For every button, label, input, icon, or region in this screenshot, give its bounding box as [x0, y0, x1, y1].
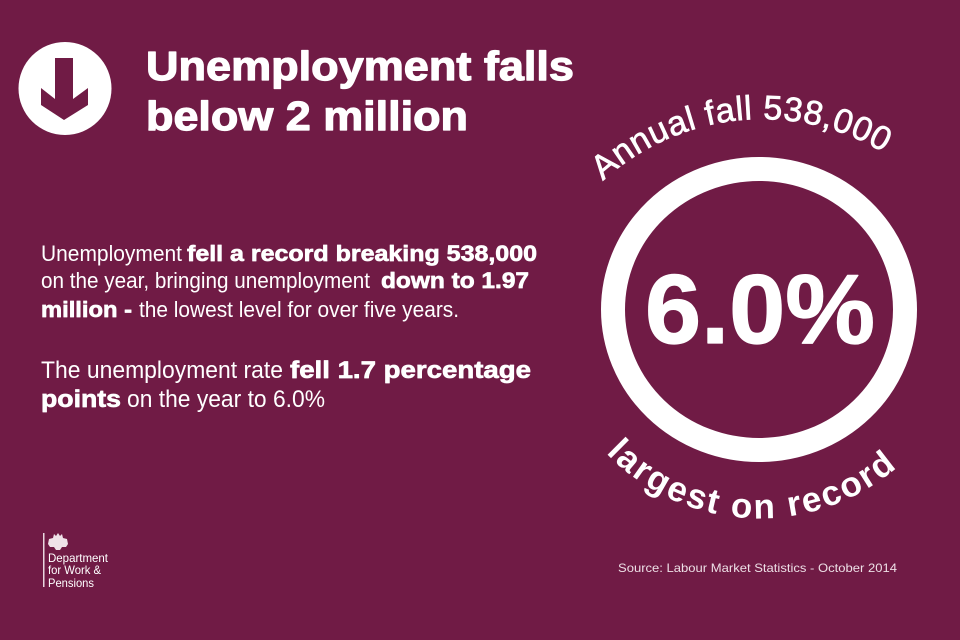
text block: unemployment rate: points — [41, 386, 121, 413]
logo rule — [43, 533, 44, 587]
title — [146, 43, 574, 139]
text block: record fall — [41, 241, 537, 322]
logo: Department for Work & Pensions — [43, 533, 109, 590]
logo text: for Work & — [48, 563, 101, 577]
big number: 6.0% — [645, 254, 875, 364]
logo text: Department — [48, 551, 109, 565]
curved caption: largest on record: largest on record — [608, 436, 896, 519]
title: Unemployment falls — [146, 43, 574, 89]
text block: record fall: down to 1.97 — [381, 268, 529, 293]
text block: record fall: fell a record breaking 538,000 — [187, 241, 537, 266]
text block: record fall: million - — [41, 297, 132, 322]
ring chart with curved captions — [594, 94, 917, 519]
text block: record fall: the lowest level for over five years. — [139, 297, 459, 322]
curved caption: annual fall: Annual fall 538,000 — [594, 94, 891, 182]
title: below 2 million — [146, 93, 468, 139]
text block: unemployment rate: on the year to 6.0% — [127, 386, 325, 413]
text block: record fall: on the year, bringing unemployment — [41, 268, 371, 293]
logo text: Pensions — [48, 576, 94, 590]
text block: unemployment rate — [41, 357, 531, 413]
icon: royal crest — [48, 533, 68, 550]
icon: down arrow in circle — [18, 42, 112, 135]
source note: Source: Labour Market Statistics - October 2014 — [618, 561, 897, 575]
ring — [613, 169, 905, 450]
logo text — [48, 551, 109, 590]
text block: unemployment rate: The unemployment rate — [41, 357, 283, 384]
text block: record fall: Unemployment — [41, 241, 183, 266]
text block: unemployment rate: fell 1.7 percentage — [290, 357, 531, 384]
